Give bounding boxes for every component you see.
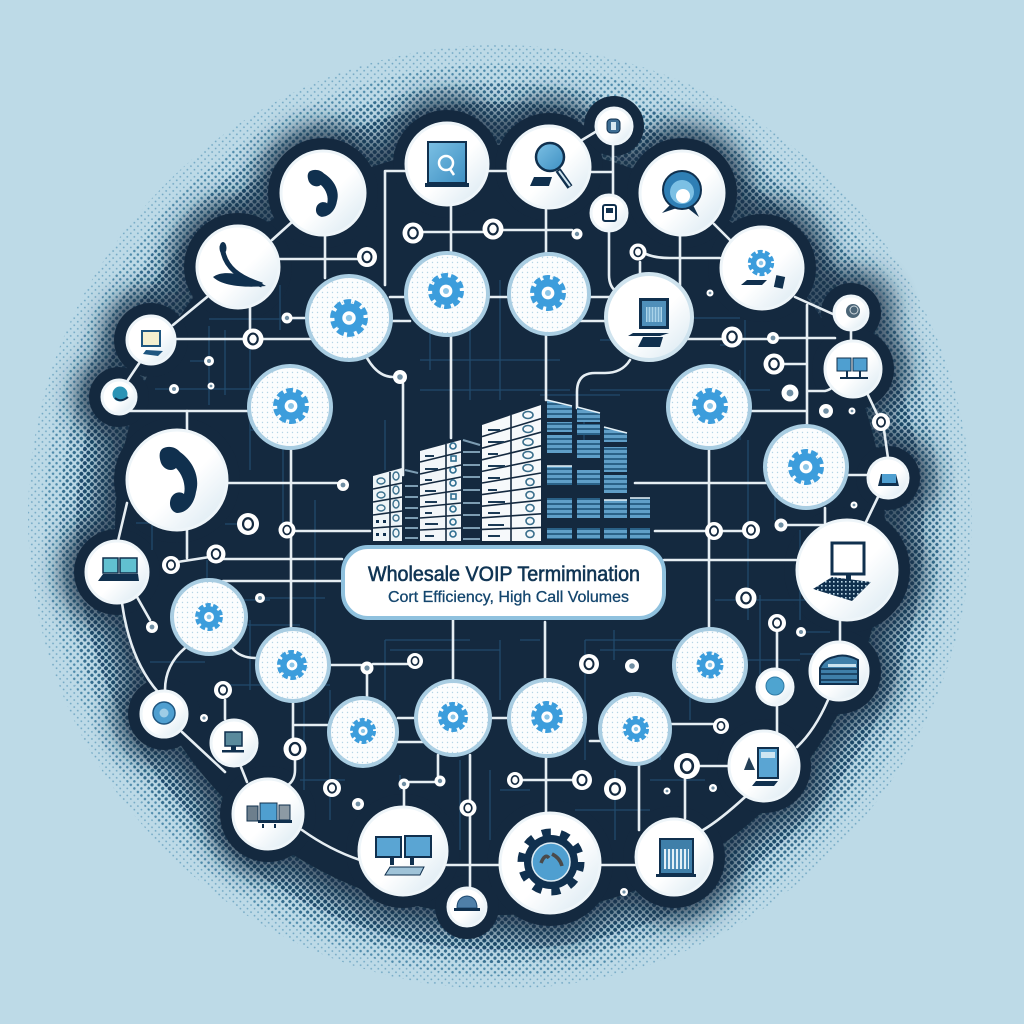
- icon node: equipment rack: [233, 779, 303, 849]
- icon node: handset resting: [197, 226, 279, 308]
- icon node: laptop with search: [406, 123, 488, 205]
- icon node: large gear: [500, 813, 600, 913]
- rack 2: [420, 440, 480, 541]
- icon node: laptop: [606, 274, 692, 360]
- icon node: small meter: [591, 195, 627, 231]
- icon node: desktop computer: [797, 520, 897, 620]
- icon node: small speaker: [834, 296, 868, 330]
- gear node 13: [674, 629, 746, 701]
- title box: [343, 547, 664, 618]
- icon node: printer: [810, 642, 868, 700]
- icon node: small monitor lower: [211, 720, 257, 766]
- server racks: [373, 400, 650, 541]
- blue server side panels: [547, 400, 650, 539]
- gear node 1: [307, 276, 391, 360]
- icon node: barcode laptop: [636, 819, 712, 895]
- faint circuit grid: [136, 280, 850, 850]
- rack 1: [373, 468, 418, 541]
- icon node: small server bottom: [448, 888, 486, 926]
- gear node 5: [668, 366, 750, 448]
- icon node: gear with device: [721, 227, 803, 309]
- icon node: telephone handset top: [281, 151, 365, 235]
- icon node: webcam: [640, 151, 724, 235]
- gear node 10: [416, 681, 490, 755]
- gear node 8: [257, 629, 329, 701]
- icon node: calculator: [729, 731, 799, 801]
- gear node 11: [509, 680, 585, 756]
- gear node 3: [509, 254, 589, 334]
- gear node 6: [765, 426, 847, 508]
- gear node 12: [600, 694, 670, 764]
- gear node 9: [329, 698, 397, 766]
- icon node: small device top: [596, 108, 632, 144]
- small connector dots: [146, 218, 890, 896]
- subheading: Cort Efficiency, High Call Volumes: [388, 589, 629, 606]
- icon node: workstation: [359, 807, 447, 895]
- connector lines: [118, 131, 888, 888]
- icon node: large telephone handset: [127, 430, 227, 530]
- gear node 4: [249, 366, 331, 448]
- icon node: magnifier: [508, 126, 590, 208]
- dark network backdrop: [61, 96, 934, 939]
- gear node 2: [406, 253, 488, 335]
- icon node: blue dot: [757, 669, 793, 705]
- icon node: small globe: [102, 380, 136, 414]
- rack 3: [482, 405, 541, 541]
- icon node: dual monitor: [825, 341, 881, 397]
- heading: Wholesale VOIP Termimination: [368, 563, 640, 586]
- icon node: small monitor: [127, 316, 175, 364]
- gear node 7: [172, 580, 246, 654]
- icon node: blue dial: [141, 691, 187, 737]
- icon node: small device right: [868, 458, 908, 498]
- icon node: small laptop: [86, 541, 148, 603]
